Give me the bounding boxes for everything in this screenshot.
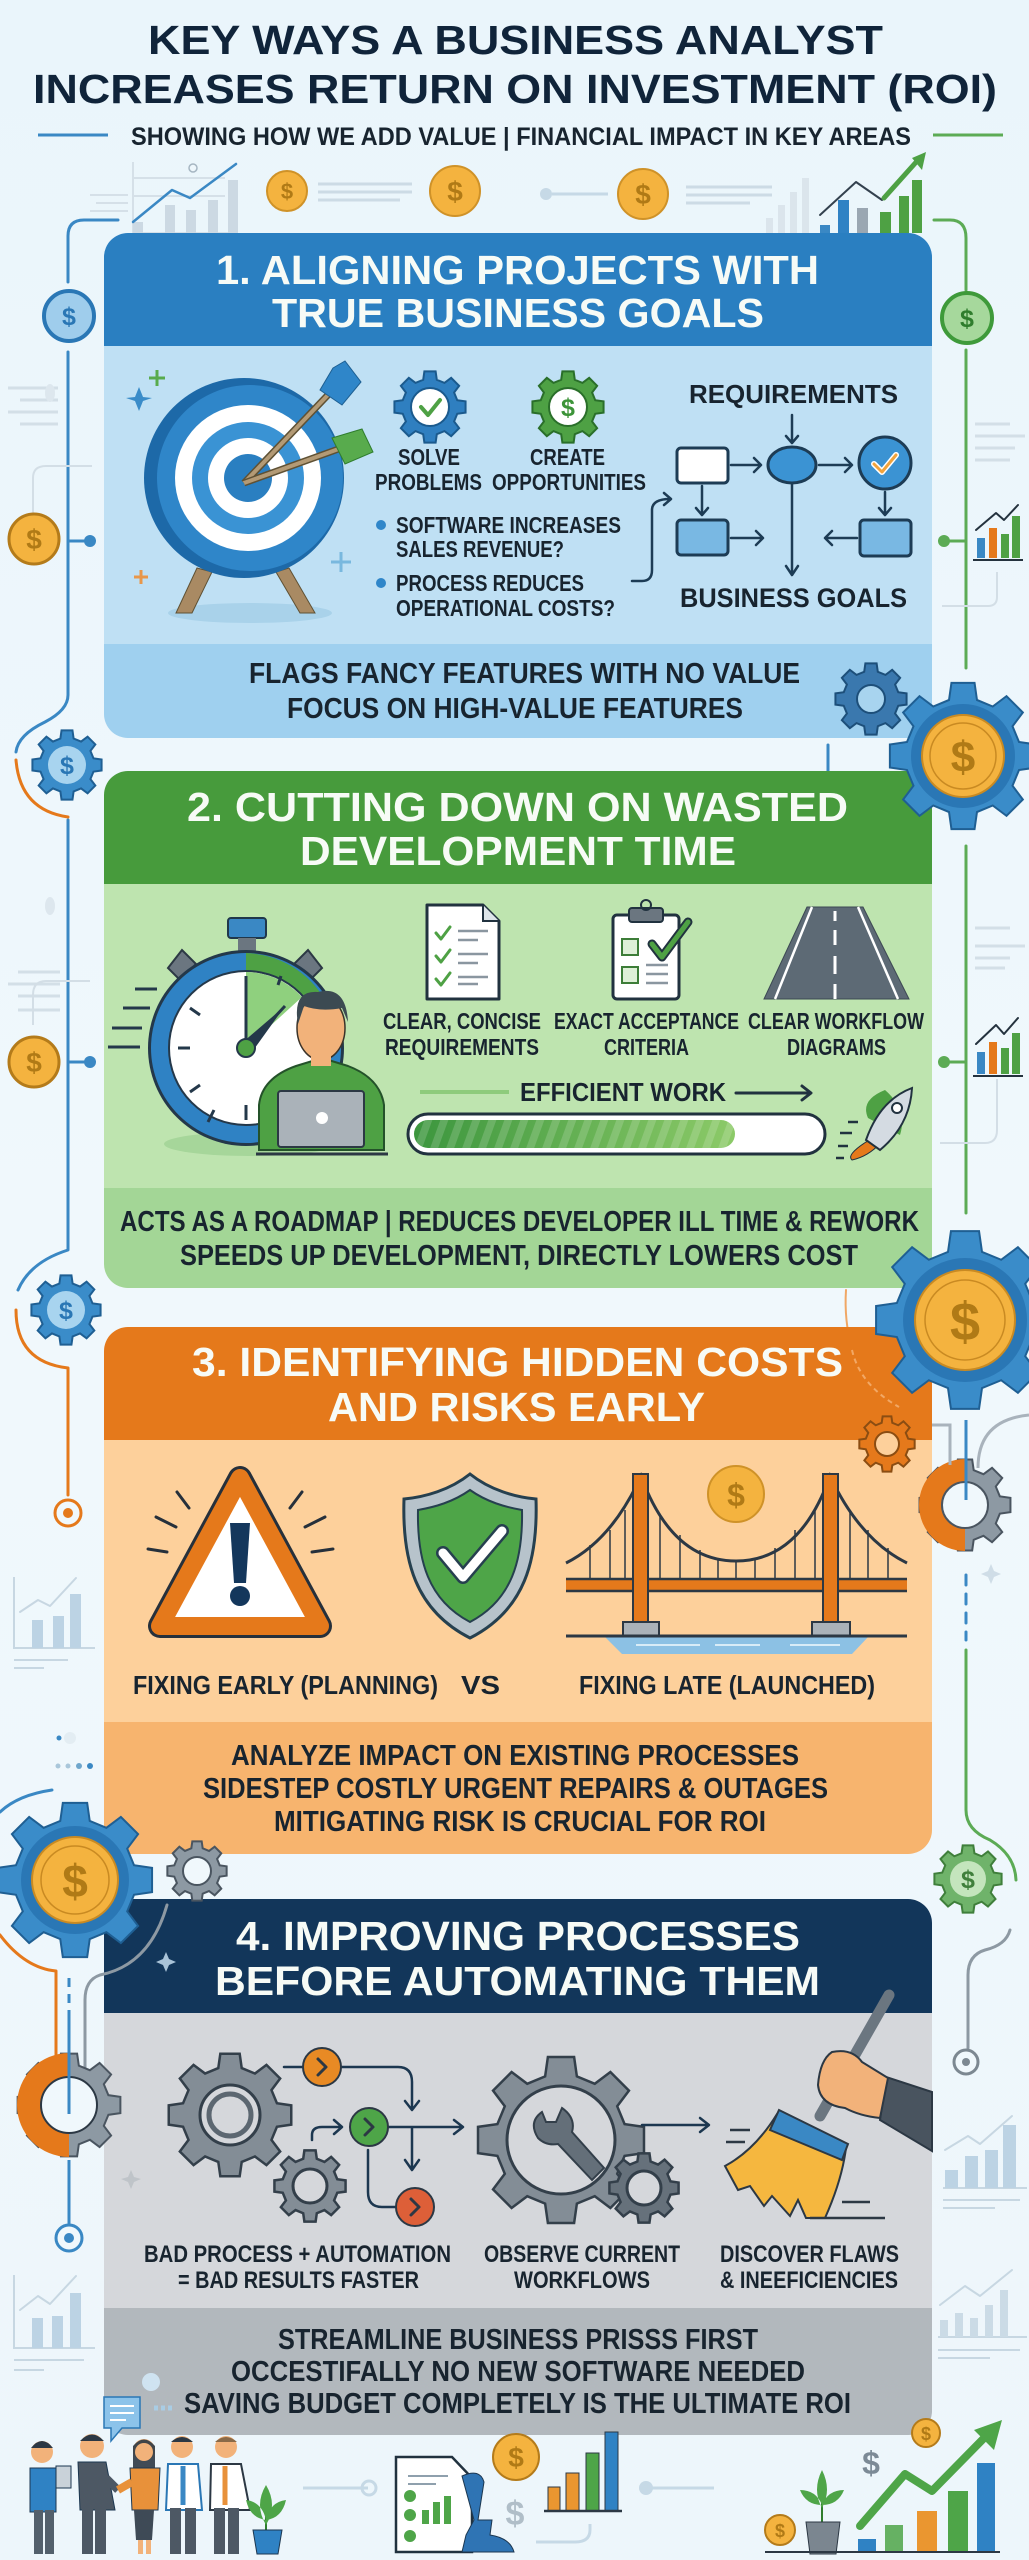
- panel 4 heading: [156, 1913, 820, 2004]
- panel 4 footer text: SAVING BUDGET COMPLETELY IS THE ULTIMATE ROI: [184, 2388, 851, 2420]
- bottom: team of people: [30, 2373, 250, 2554]
- labels: requirement artifacts: DIAGRAMS: [787, 1034, 886, 1060]
- gear: big dollar right 1: $: [951, 733, 975, 782]
- gear: big dollar right 2: [876, 1231, 1029, 1409]
- title: [33, 17, 997, 112]
- panel 1 heading: [216, 247, 819, 336]
- bullet list: [376, 512, 621, 621]
- gear: small dollar left 1: [32, 730, 102, 800]
- labels: requirement artifacts: EXACT ACCEPTANCE: [554, 1008, 739, 1034]
- gear: big dollar left: [0, 1803, 152, 1957]
- faded chart right 2: [938, 2270, 1027, 2358]
- top coin row: [267, 166, 772, 219]
- icon: dollar gear: $: [561, 394, 575, 422]
- bullet list: PROCESS REDUCES: [396, 570, 584, 596]
- left connector lines: [0, 220, 118, 1812]
- labels: fixing early vs late: [133, 1670, 875, 1700]
- panel 2 heading: DEVELOPMENT TIME: [300, 828, 736, 874]
- coin: blue left: $: [62, 303, 76, 331]
- bottom line connector left: [303, 2481, 376, 2495]
- progress bar: [408, 1114, 825, 1154]
- labels: solve problems, create opportunities: SOLVE: [398, 444, 460, 470]
- title: INCREASES RETURN ON INVESTMENT (ROI): [33, 66, 997, 112]
- bullet list: SALES REVENUE?: [396, 536, 564, 562]
- labels: solve problems, create opportunities: OPPORTUNITIES: [492, 469, 646, 495]
- gear: half orange half grey left: [17, 1978, 120, 2225]
- panel 2 footer text: [120, 1206, 919, 1272]
- faded chart left 1: [14, 1577, 95, 1668]
- gear: green dollar right: [934, 1845, 1002, 1913]
- gear: green dollar right: $: [961, 1866, 975, 1894]
- icon: check gear: [394, 371, 466, 443]
- gear: small dollar left 2: [31, 1275, 101, 1345]
- flow diagram: requirements to business goals: REQUIREMENTS: [689, 379, 898, 409]
- labels: requirement artifacts: CLEAR WORKFLOW: [748, 1008, 924, 1034]
- side decoration left: [8, 384, 93, 1769]
- panel 4 footer: [104, 2308, 932, 2435]
- icon: stopwatch: [108, 918, 344, 1156]
- labels: process steps: OBSERVE CURRENT: [484, 2241, 680, 2268]
- icon: bad process gears: [121, 2054, 346, 2222]
- panel 2 header: [104, 771, 932, 884]
- icon: sparkles: [126, 370, 351, 584]
- faded chart left 2: [14, 2275, 95, 2370]
- panel 3 footer text: ANALYZE IMPACT ON EXISTING PROCESSES: [231, 1740, 799, 1772]
- icon: gear with wrench: [478, 2057, 679, 2223]
- panel 1 heading: TRUE BUSINESS GOALS: [272, 290, 764, 336]
- panel 4 header: [104, 1899, 932, 2013]
- efficient work label with arrow: [420, 1077, 811, 1107]
- panel 4 footer text: [184, 2324, 851, 2420]
- panel 1 heading: 1. ALIGNING PROJECTS WITH: [216, 247, 819, 293]
- gear: big dollar right 2: $: [950, 1292, 980, 1352]
- top coin row: $: [447, 176, 463, 207]
- labels: process steps: WORKFLOWS: [514, 2267, 650, 2294]
- panel 3 heading: AND RISKS EARLY: [328, 1384, 705, 1430]
- panel 3 footer: [104, 1722, 932, 1854]
- labels: process steps: & INEEFICIENCIES: [720, 2267, 898, 2294]
- panel 3 footer text: [203, 1740, 828, 1838]
- bottom: growth bars and arrow: $: [921, 2424, 931, 2444]
- gear: small dollar left 1: $: [60, 752, 74, 780]
- bottom connector right of chart: [536, 2481, 714, 2542]
- process flow arrows with nodes: [284, 2048, 463, 2226]
- panel 1 footer: [104, 644, 932, 738]
- bullet list: OPERATIONAL COSTS?: [396, 595, 615, 621]
- left lower connectors: [0, 1905, 167, 2075]
- bottom: growth plant with coin: $: [775, 2521, 785, 2541]
- panel 4 footer text: OCCESTIFALLY NO NEW SOFTWARE NEEDED: [231, 2356, 805, 2388]
- icon: road: [764, 907, 909, 999]
- bottom: dollar coin and bar chart: $: [506, 2495, 525, 2533]
- top coin row: $: [281, 179, 293, 204]
- panel 2 footer text: SPEEDS UP DEVELOPMENT, DIRECTLY LOWERS COST: [180, 1240, 858, 1272]
- top left chart decoration: [90, 162, 238, 233]
- coin: gold left 2: [9, 1037, 96, 1087]
- coin: gold left 2: $: [26, 1047, 42, 1078]
- icon: hand with broom: [725, 1995, 932, 2218]
- panel 2 heading: 2. CUTTING DOWN ON WASTED: [187, 784, 848, 830]
- panel 3 footer text: MITIGATING RISK IS CRUCIAL FOR ROI: [274, 1806, 766, 1838]
- mini bar chart right 2: [938, 1018, 1023, 1076]
- icon: analyst at laptop: [256, 991, 388, 1154]
- labels: solve problems, create opportunities: PROBLEMS: [375, 469, 482, 495]
- labels: process steps: BAD PROCESS + AUTOMATION: [144, 2241, 451, 2268]
- efficient work label with arrow: EFFICIENT WORK: [520, 1077, 726, 1107]
- title: KEY WAYS A BUSINESS ANALYST: [148, 17, 883, 63]
- bottom: growth plant with coin: [765, 2470, 844, 2554]
- panel 1 footer text: [249, 658, 800, 725]
- panel 1 footer text: FLAGS FANCY FEATURES WITH NO VALUE: [249, 658, 800, 690]
- bottom: growth bars and arrow: $: [862, 2445, 880, 2481]
- labels: fixing early vs late: VS: [461, 1670, 500, 1700]
- panel 1 footer text: FOCUS ON HIGH-VALUE FEATURES: [287, 693, 743, 725]
- panel 3 heading: [192, 1339, 899, 1430]
- labels: solve problems, create opportunities: CREATE: [530, 444, 605, 470]
- target ring endpoint left 1: [55, 1500, 81, 1526]
- labels: fixing early vs late: FIXING LATE (LAUNCHED): [579, 1670, 875, 1700]
- gear: half orange half grey right: [919, 1415, 1029, 1551]
- gear: small dollar left 2: $: [59, 1297, 73, 1325]
- icon: acceptance clipboard: [613, 900, 688, 999]
- icon: shield: [404, 1474, 536, 1638]
- panel 2 heading: [187, 784, 848, 874]
- gear: small blue panel 1 corner: [835, 663, 907, 735]
- top right growth chart: [766, 152, 926, 233]
- icon: suspension bridge: [566, 1466, 907, 1654]
- bottom: potted plant left: [246, 2485, 286, 2554]
- panel 3 header: [104, 1327, 932, 1440]
- top coin row: $: [635, 179, 651, 210]
- labels: process steps: [144, 2241, 899, 2294]
- coin: gold left 1: [9, 514, 96, 564]
- bullet list: SOFTWARE INCREASES: [396, 512, 621, 538]
- side decoration right: [940, 424, 1025, 1584]
- labels: solve problems, create opportunities: [375, 444, 646, 495]
- gear: big dollar right 1: [890, 683, 1029, 829]
- labels: requirement artifacts: REQUIREMENTS: [385, 1034, 539, 1060]
- bottom: report document with robotic arm: [396, 2457, 514, 2552]
- panel 3: hidden costs and risks: [104, 1327, 932, 1854]
- labels: requirement artifacts: [383, 1008, 924, 1060]
- panel 1: aligning projects: [104, 233, 932, 738]
- subtitle: SHOWING HOW WE ADD VALUE | FINANCIAL IMPACT IN KEY AREAS: [131, 123, 911, 151]
- gear: big dollar left: $: [62, 1855, 88, 1907]
- icon: target with arrows: [144, 361, 373, 623]
- bottom: dollar coin and bar chart: [493, 2432, 622, 2533]
- target ring endpoint right: [954, 2050, 978, 2074]
- gear: small grey top: [167, 1841, 227, 1901]
- icon: requirements document: [427, 905, 499, 999]
- flow diagram: requirements to business goals: [632, 379, 911, 613]
- icon: warning triangle: [148, 1478, 333, 1626]
- coin: gold left 1: $: [26, 524, 42, 555]
- arrow: to broom: [642, 2118, 709, 2132]
- mini bar chart right 1: [938, 505, 1023, 560]
- bottom: dollar coin and bar chart: $: [508, 2442, 524, 2473]
- flow diagram: requirements to business goals: BUSINESS GOALS: [680, 583, 907, 613]
- panel 4 heading: 4. IMPROVING PROCESSES: [236, 1913, 800, 1959]
- labels: requirement artifacts: CRITERIA: [604, 1034, 689, 1060]
- panel 1 header: [104, 233, 932, 346]
- panel 2 footer: [104, 1188, 932, 1288]
- icon: dollar gear: [532, 371, 604, 443]
- panel 4: improving processes: [104, 1899, 932, 2435]
- coin: green right: [942, 293, 992, 343]
- labels: process steps: DISCOVER FLAWS: [720, 2241, 899, 2268]
- labels: fixing early vs late: FIXING EARLY (PLANNING): [133, 1670, 438, 1700]
- icon: suspension bridge: $: [727, 1477, 745, 1513]
- bottom: growth bars and arrow: [765, 2419, 1002, 2552]
- panel 3 footer text: SIDESTEP COSTLY URGENT REPAIRS & OUTAGES: [203, 1773, 828, 1805]
- labels: process steps: = BAD RESULTS FASTER: [178, 2267, 419, 2294]
- panel 4 heading: BEFORE AUTOMATING THEM: [215, 1958, 820, 2004]
- panel 2: cutting wasted time: [104, 771, 932, 1288]
- panel 3 heading: 3. IDENTIFYING HIDDEN COSTS: [192, 1339, 843, 1385]
- right connector lines: [828, 220, 1016, 2048]
- coin: blue left: [44, 291, 94, 341]
- target ring endpoint left 2: [56, 2225, 82, 2251]
- labels: requirement artifacts: CLEAR, CONCISE: [383, 1008, 541, 1034]
- coin: green right: $: [960, 305, 974, 333]
- gear: small orange: [859, 1416, 915, 1472]
- faded chart right 1: [943, 2116, 1027, 2208]
- panel 4 footer text: STREAMLINE BUSINESS PRISSS FIRST: [278, 2324, 758, 2356]
- icon: rocket: [836, 1088, 912, 1160]
